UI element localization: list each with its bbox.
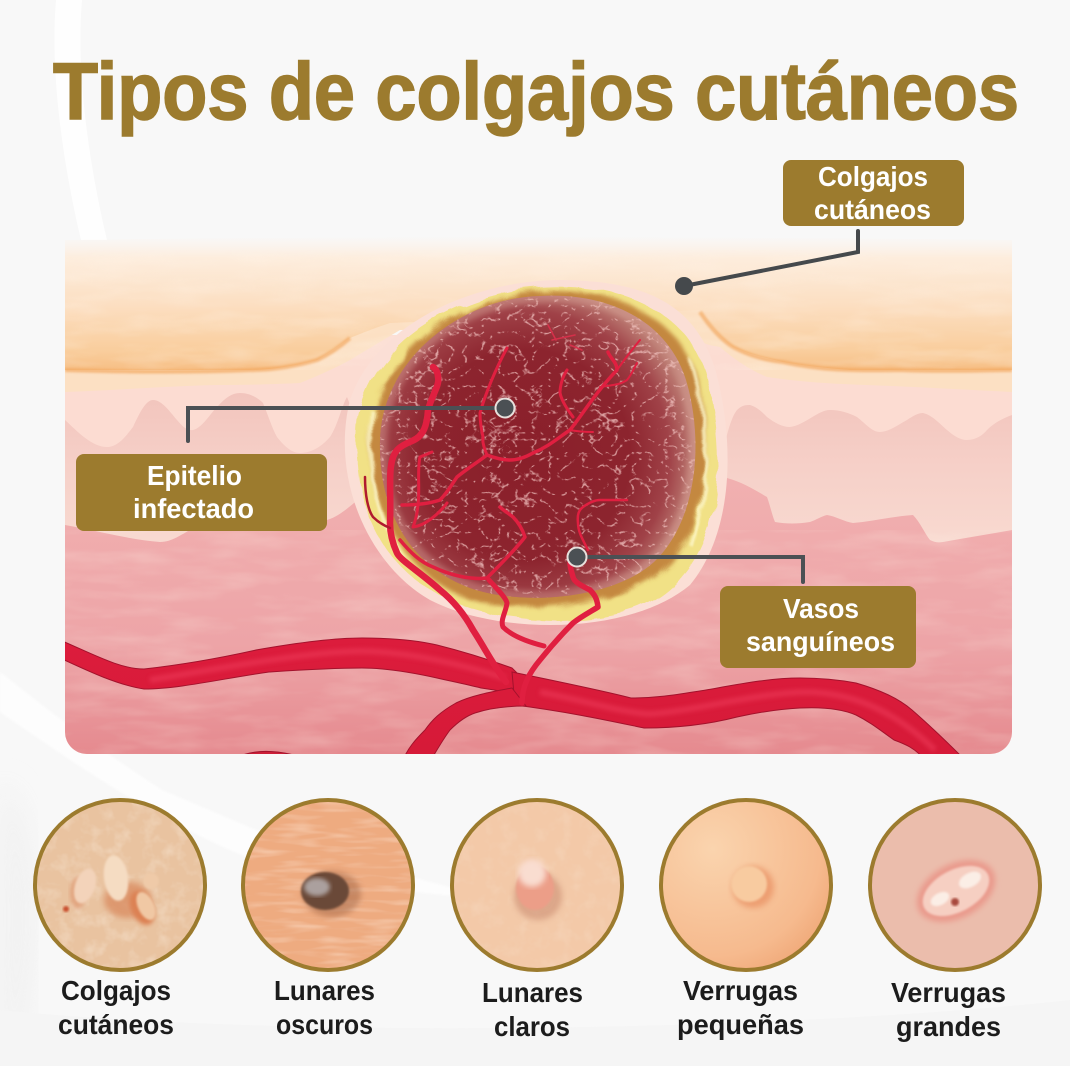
callout: colgajos cutáneos: [675, 160, 964, 295]
label: Colgajos: [818, 161, 928, 192]
caption: oscuros: [276, 1009, 373, 1040]
caption: cutáneos: [58, 1009, 174, 1040]
caption: [58, 975, 174, 1040]
label: [746, 593, 895, 657]
label: [133, 460, 254, 524]
photo circle: [445, 795, 625, 975]
leader line: [577, 557, 803, 582]
photo circle: [655, 795, 835, 975]
item: verrugas pequeñas: [655, 795, 835, 1040]
caption: Lunares: [274, 975, 375, 1006]
caption: Verrugas: [683, 975, 798, 1006]
bump outline around lesion: [345, 280, 728, 625]
photo circle: [30, 795, 210, 975]
marker: [675, 277, 693, 295]
photo circle: [865, 795, 1045, 975]
item: lunares claros: [445, 795, 625, 1042]
lesion mass: [380, 296, 696, 598]
capillaries: [365, 325, 640, 703]
label box: [720, 586, 916, 668]
caption: [482, 977, 583, 1042]
callout: vasos sanguíneos: [568, 548, 916, 668]
right artery: [512, 672, 965, 760]
caption: [677, 975, 804, 1040]
panel: skin cross-section illustration: [60, 237, 1012, 760]
label: cutáneos: [814, 194, 931, 225]
left artery: [65, 638, 518, 691]
label box: [783, 160, 964, 226]
caption: pequeñas: [677, 1009, 804, 1040]
leader line: [684, 231, 858, 286]
callout: epitelio infectado: [76, 398, 514, 531]
caption: [891, 977, 1006, 1042]
caption: Verrugas: [891, 977, 1006, 1008]
lower arch: [403, 688, 526, 760]
item: colgajos cutáneos: [30, 795, 210, 1040]
arteries: [60, 638, 965, 760]
marker: [568, 548, 586, 566]
caption: Lunares: [482, 977, 583, 1008]
label box: [76, 454, 327, 531]
artery highlights: [150, 651, 935, 750]
marker: [496, 398, 514, 418]
photo circle: [240, 795, 420, 975]
caption: [274, 975, 375, 1040]
label: infectado: [133, 493, 254, 524]
label: sanguíneos: [746, 626, 895, 657]
leader line: [188, 408, 505, 441]
label: [814, 161, 931, 225]
item: verrugas grandes: [865, 795, 1045, 1042]
caption: Colgajos: [61, 975, 171, 1006]
lesion halo: [357, 287, 718, 621]
caption: grandes: [896, 1011, 1001, 1042]
label: Vasos: [783, 593, 859, 624]
caption: claros: [494, 1011, 570, 1042]
skin layers: [65, 237, 1012, 755]
small vessel at panel bottom: [244, 750, 292, 754]
item: lunares oscuros: [240, 795, 420, 1040]
label: Epitelio: [147, 460, 242, 491]
